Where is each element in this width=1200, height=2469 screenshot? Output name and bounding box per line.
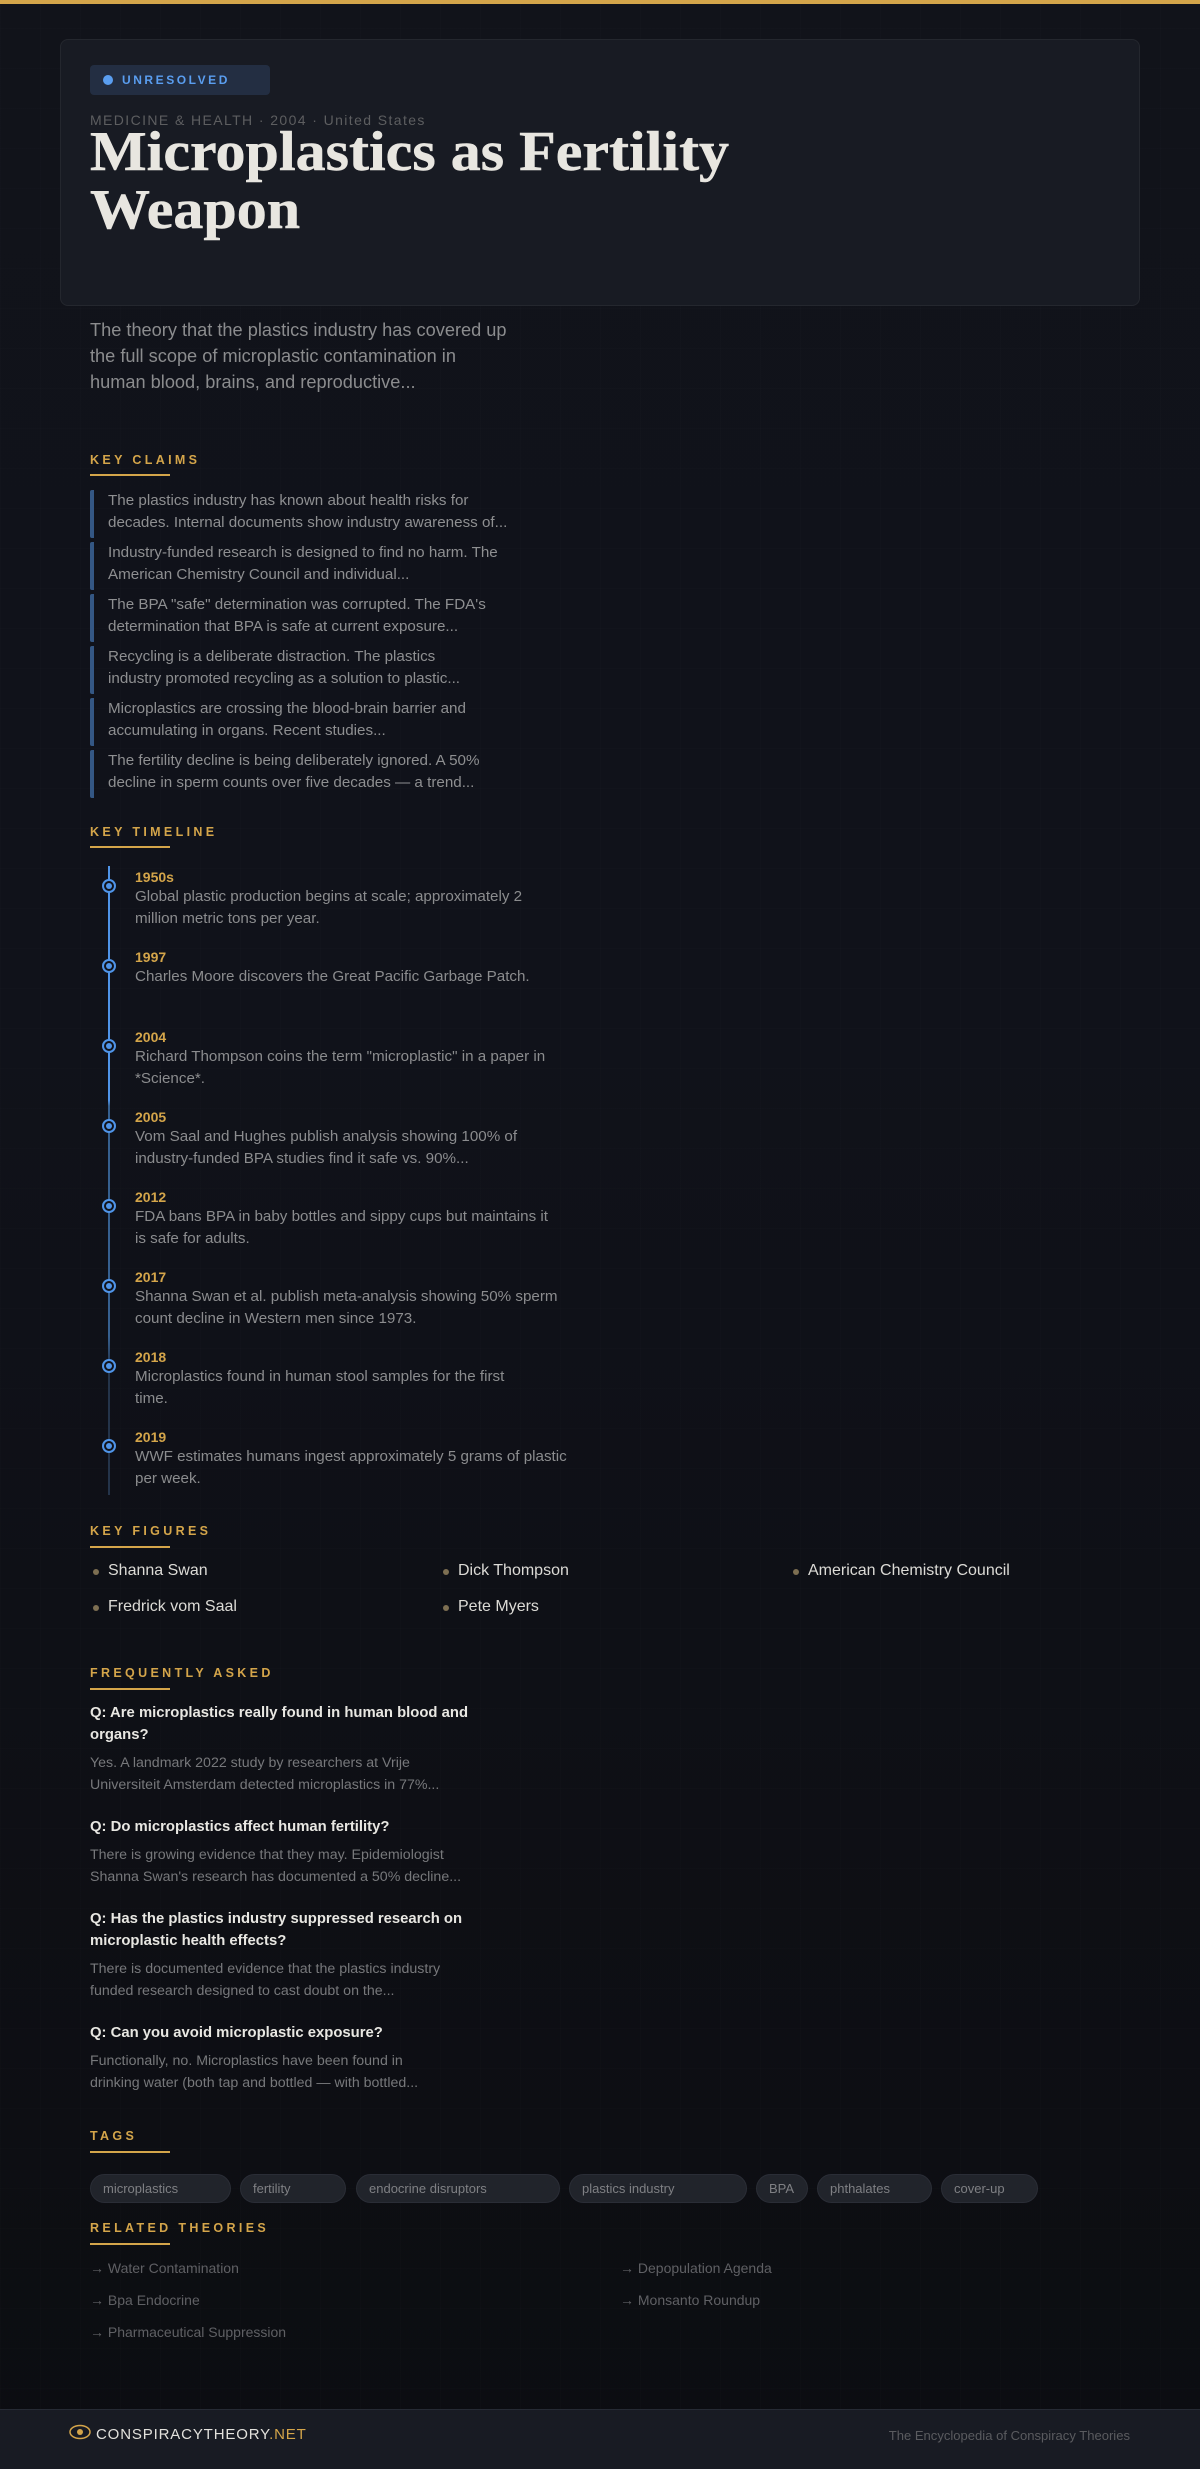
panel: header card — [60, 39, 1140, 306]
panel: related theories — [90, 2260, 772, 2340]
claim 3: determination that BPA is safe at current exposure... — [108, 618, 458, 635]
icon: eye logo — [69, 2424, 91, 2440]
timeline axis — [108, 866, 110, 1495]
badge label: UNRESOLVED — [122, 73, 230, 87]
timeline entry: 1950s: Global plastic production begins at scale; approximately 2 — [135, 888, 522, 905]
timeline entry: 2019: per week. — [135, 1470, 201, 1487]
timeline entry: 2019 — [135, 1429, 567, 1487]
intro paragraph — [90, 320, 507, 392]
figure: Dick Thompson: Dick Thompson — [458, 1562, 569, 1579]
faq item 1: organs? — [90, 1727, 149, 1743]
related: Bpa Endocrine: → Bpa Endocrine — [90, 2292, 200, 2308]
claim 2: American Chemistry Council and individual... — [108, 566, 409, 583]
claim 5: Microplastics are crossing the blood-brain barrier and — [108, 700, 466, 717]
claim 1: decades. Internal documents show industry awareness of... — [108, 514, 507, 531]
timeline entry: 1950s: 1950s — [135, 869, 174, 885]
claim 1: The plastics industry has known about health risks for — [108, 492, 468, 509]
timeline entry: 2004: 2004 — [135, 1029, 166, 1045]
timeline entry: 2019: WWF estimates humans ingest approximately 5 grams of plastic — [135, 1448, 567, 1465]
claim 6: decline in sperm counts over five decades — a trend... — [108, 774, 474, 791]
timeline entry: 2012: 2012 — [135, 1189, 166, 1205]
faq item 2: Q: Do microplastics affect human fertility? — [90, 1819, 389, 1835]
timeline entry: 2005: 2005 — [135, 1109, 166, 1125]
tag: endocrine disruptors — [356, 2174, 560, 2203]
timeline entry: 1997 — [135, 949, 530, 985]
faq item 3: There is documented evidence that the plastics industry — [90, 1961, 440, 1977]
tag: phthalates: phthalates — [830, 2181, 890, 2196]
claim 3: The BPA "safe" determination was corrupted. The FDA's — [108, 596, 486, 613]
timeline entry: 2004: Richard Thompson coins the term "microplastic" in a paper in — [135, 1048, 545, 1065]
title: Microplastics as Fertility — [90, 121, 729, 183]
claim 4 — [90, 646, 520, 694]
timeline entry: 2017: count decline in Western men since 1973. — [135, 1310, 416, 1327]
tag: endocrine disruptors: endocrine disruptors — [369, 2181, 487, 2196]
timeline entry: 2018: Microplastics found in human stool samples for the first — [135, 1368, 504, 1385]
timeline entry: 2018 — [135, 1349, 504, 1407]
timeline entry: 2017 — [135, 1269, 558, 1327]
faq item 2: Shanna Swan's research has documented a 50% decline... — [90, 1869, 461, 1885]
panel: timeline — [102, 866, 116, 1495]
timeline entry: 2012: FDA bans BPA in baby bottles and sippy cups but maintains it — [135, 1208, 548, 1225]
timeline entry: 2005: industry-funded BPA studies find it safe vs. 90%... — [135, 1150, 469, 1167]
panel: tags — [90, 2174, 1038, 2203]
related: Pharmaceutical Suppression: → Pharmaceutical Suppression — [90, 2324, 286, 2340]
tag: plastics industry — [569, 2174, 747, 2203]
timeline entry: 1997: 1997 — [135, 949, 166, 965]
timeline entry: 2019: 2019 — [135, 1429, 166, 1445]
heading: key timeline: KEY TIMELINE — [90, 825, 217, 839]
panel: key claims list — [90, 490, 507, 798]
faq item 3: funded research designed to cast doubt on the... — [90, 1983, 394, 1999]
timeline entry: 2004 — [135, 1029, 545, 1087]
heading: tags: TAGS — [90, 2129, 137, 2143]
brand wordmark: CONSPIRACYTHEORY.NET — [96, 2426, 307, 2443]
tag: cover-up — [941, 2174, 1038, 2203]
timeline entry: 1950s: million metric tons per year. — [135, 910, 320, 927]
related: Depopulation Agenda: → Depopulation Agenda — [620, 2260, 772, 2276]
timeline entry: 2005: Vom Saal and Hughes publish analysis showing 100% of — [135, 1128, 517, 1145]
claim 5: accumulating in organs. Recent studies... — [108, 722, 386, 739]
heading: related theories: RELATED THEORIES — [90, 2221, 269, 2235]
title: Weapon — [90, 179, 300, 241]
panel: key figures list — [93, 1562, 1010, 1615]
timeline entry: 2018: time. — [135, 1390, 168, 1407]
heading: key claims: KEY CLAIMS — [90, 453, 200, 467]
tag: BPA — [756, 2174, 808, 2203]
tag: fertility — [240, 2174, 346, 2203]
figure: Pete Myers: Pete Myers — [458, 1598, 539, 1615]
claim 2: Industry-funded research is designed to find no harm. The — [108, 544, 498, 561]
claim 1 — [90, 490, 520, 538]
tag: microplastics: microplastics — [103, 2181, 178, 2196]
timeline entry: 2005 — [135, 1109, 518, 1167]
related: Water Contamination: → Water Contamination — [90, 2260, 239, 2276]
faq item 1: Q: Are microplastics really found in human blood and — [90, 1705, 468, 1721]
figure: American Chemistry Council: American Chemistry Council — [808, 1562, 1010, 1579]
claim 6 — [90, 750, 520, 798]
faq item 1: Universiteit Amsterdam detected microplastics in 77%... — [90, 1777, 439, 1793]
footer bar — [0, 2409, 1200, 2469]
intro paragraph: human blood, brains, and reproductive... — [90, 372, 416, 392]
faq item 3 — [90, 1911, 462, 1999]
faq item 2 — [90, 1819, 461, 1885]
faq item 1 — [90, 1705, 468, 1793]
title — [90, 121, 729, 241]
intro paragraph: the full scope of microplastic contamination in — [90, 346, 456, 366]
status badge: unresolved — [90, 65, 270, 95]
tag: cover-up: cover-up — [954, 2181, 1005, 2196]
tag: fertility: fertility — [253, 2181, 291, 2196]
figure: Shanna Swan: Shanna Swan — [108, 1562, 208, 1579]
heading: key figures: KEY FIGURES — [90, 1524, 211, 1538]
claim 6: The fertility decline is being deliberately ignored. A 50% — [108, 752, 479, 769]
timeline entry: 1997: Charles Moore discovers the Great Pacific Garbage Patch. — [135, 968, 530, 985]
tag: phthalates — [817, 2174, 932, 2203]
timeline entry: 2017: Shanna Swan et al. publish meta-analysis showing 50% sperm — [135, 1288, 558, 1305]
faq item 4: Q: Can you avoid microplastic exposure? — [90, 2025, 383, 2041]
claim 4: Recycling is a deliberate distraction. The plastics — [108, 648, 435, 665]
icon: status dot — [103, 75, 113, 85]
faq item 1: Yes. A landmark 2022 study by researchers at Vrije — [90, 1755, 410, 1771]
timeline entry: 2012 — [135, 1189, 548, 1247]
claim 5 — [90, 698, 520, 746]
timeline entry markers — [102, 879, 116, 1453]
timeline entry: 2017: 2017 — [135, 1269, 166, 1285]
timeline entry: 2018: 2018 — [135, 1349, 166, 1365]
timeline entry: 2004: *Science*. — [135, 1070, 205, 1087]
heading: frequently asked: FREQUENTLY ASKED — [90, 1666, 274, 1680]
faq item 3: Q: Has the plastics industry suppressed research on — [90, 1911, 462, 1927]
claim 3 — [90, 594, 520, 642]
intro paragraph: The theory that the plastics industry has covered up — [90, 320, 507, 340]
faq item 3: microplastic health effects? — [90, 1933, 286, 1949]
faq item 4: drinking water (both tap and bottled — with bottled... — [90, 2075, 418, 2091]
timeline entry: 1950s — [135, 869, 522, 927]
category and date meta line: MEDICINE & HEALTH · 2004 · United States — [90, 112, 426, 128]
claim 2 — [90, 542, 520, 590]
faq item 4 — [90, 2025, 418, 2091]
top accent bar — [0, 0, 1200, 4]
claim 4: industry promoted recycling as a solution to plastic... — [108, 670, 460, 687]
faq item 4: Functionally, no. Microplastics have been found in — [90, 2053, 403, 2069]
timeline entry: 2012: is safe for adults. — [135, 1230, 250, 1247]
faq item 2: There is growing evidence that they may. Epidemiologist — [90, 1847, 444, 1863]
tag: plastics industry: plastics industry — [582, 2181, 674, 2196]
figure: Fredrick vom Saal: Fredrick vom Saal — [108, 1598, 237, 1615]
footer tagline: The Encyclopedia of Conspiracy Theories — [889, 2428, 1130, 2443]
tag: microplastics — [90, 2174, 231, 2203]
tag: BPA: BPA — [769, 2181, 794, 2196]
related: Monsanto Roundup: → Monsanto Roundup — [620, 2292, 760, 2308]
